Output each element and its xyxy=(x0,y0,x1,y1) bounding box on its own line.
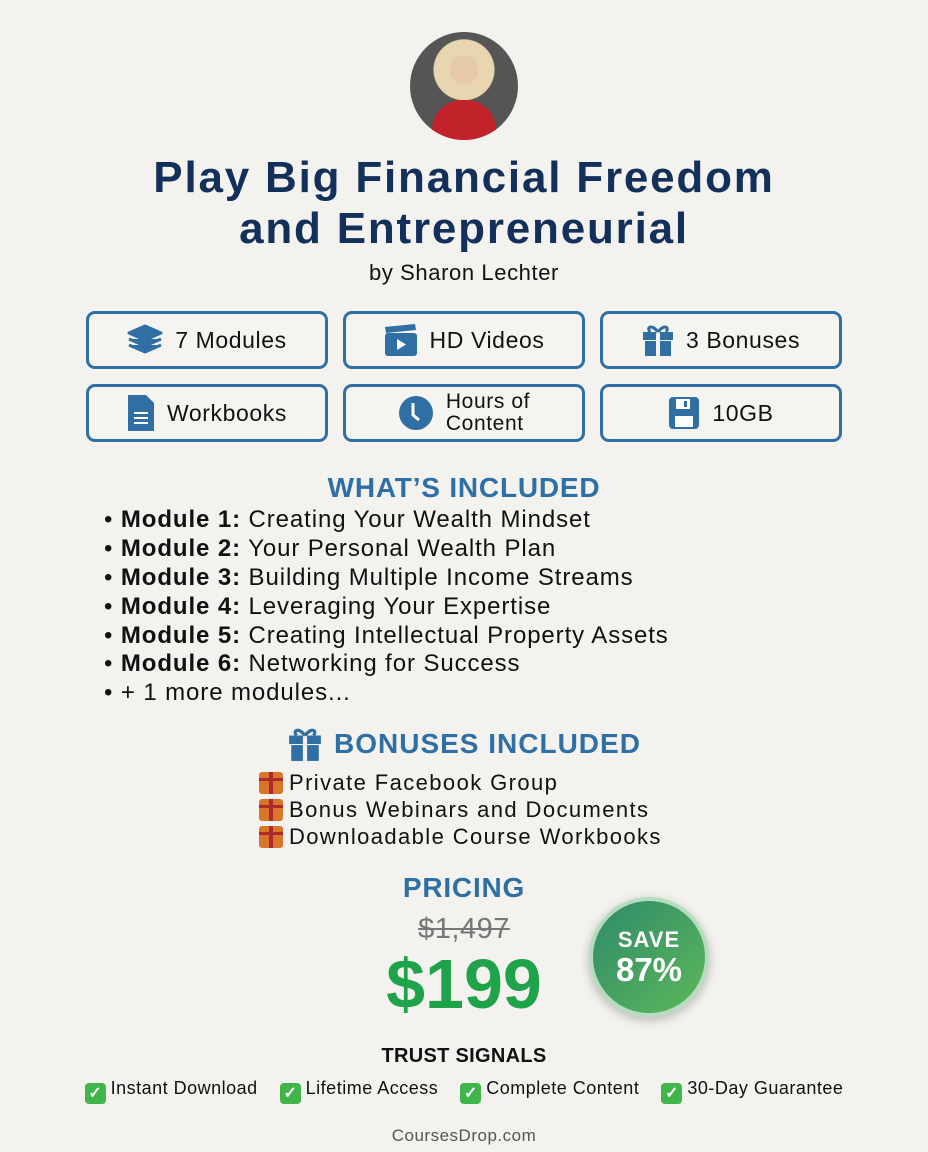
box: 3 bonuses xyxy=(600,311,842,369)
box: 10GB xyxy=(600,384,842,442)
heading: bonuses included: BONUSES INCLUDED xyxy=(334,728,641,759)
box: HD videos xyxy=(343,311,585,369)
subtitle: author: by Sharon Lechter xyxy=(369,260,559,285)
box: workbooks xyxy=(86,384,328,442)
badge: save 87%: SAVE xyxy=(618,927,680,952)
module list xyxy=(104,506,669,706)
trust signals row: ✓ xyxy=(464,1085,477,1102)
box: workbooks: Workbooks xyxy=(167,400,287,426)
old price: $1,497 xyxy=(418,913,510,945)
module list: • Module 2: Your Personal Wealth Plan xyxy=(104,535,556,562)
trust signals row: ✓ xyxy=(283,1085,297,1102)
badge: save 87% xyxy=(589,897,709,1017)
box: 7 modules xyxy=(86,311,328,369)
title xyxy=(153,153,775,253)
footer: CoursesDrop.com xyxy=(392,1126,536,1145)
module list: • Module 5: Creating Intellectual Property Assets xyxy=(104,622,669,649)
module list: • Module 3: Building Multiple Income Streams xyxy=(104,564,634,591)
trust signals row: Instant Download Lifetime Access Complete Content 30-Day Guarantee xyxy=(111,1078,843,1098)
module list: • + 1 more modules... xyxy=(104,679,351,706)
module list: • Module 1: Creating Your Wealth Mindset xyxy=(104,506,591,533)
box: 7 modules: 7 Modules xyxy=(175,326,287,352)
module list: • Module 6: Networking for Success xyxy=(104,650,520,677)
bonus list xyxy=(259,770,662,849)
box: hours of content: Content xyxy=(446,412,524,435)
feature boxes xyxy=(86,311,842,442)
box: hours of content xyxy=(343,384,585,442)
module list: • Module 4: Leveraging Your Expertise xyxy=(104,593,551,620)
title: and Entrepreneurial xyxy=(239,204,689,253)
box: hours of content: Hours of xyxy=(446,390,530,413)
photo: author portrait xyxy=(410,32,518,140)
current price: $199 xyxy=(386,945,542,1023)
box: HD videos: HD Videos xyxy=(430,326,544,352)
box: 10GB: 10GB xyxy=(712,400,774,426)
badge: save 87%: 87% xyxy=(616,951,682,988)
trust signals row: ✓ xyxy=(88,1085,102,1102)
heading: trust signals: TRUST SIGNALS xyxy=(381,1045,546,1067)
trust signals row: ✓ xyxy=(665,1085,679,1102)
bonus list: Private Facebook Group xyxy=(289,770,558,795)
heading: what's included: WHAT’S INCLUDED xyxy=(328,472,600,503)
box: 3 bonuses: 3 Bonuses xyxy=(686,326,800,352)
heading: pricing: PRICING xyxy=(403,872,525,903)
bonus list: Bonus Webinars and Documents xyxy=(289,797,649,822)
bonus list: Downloadable Course Workbooks xyxy=(289,824,662,849)
title: Play Big Financial Freedom xyxy=(153,153,775,202)
